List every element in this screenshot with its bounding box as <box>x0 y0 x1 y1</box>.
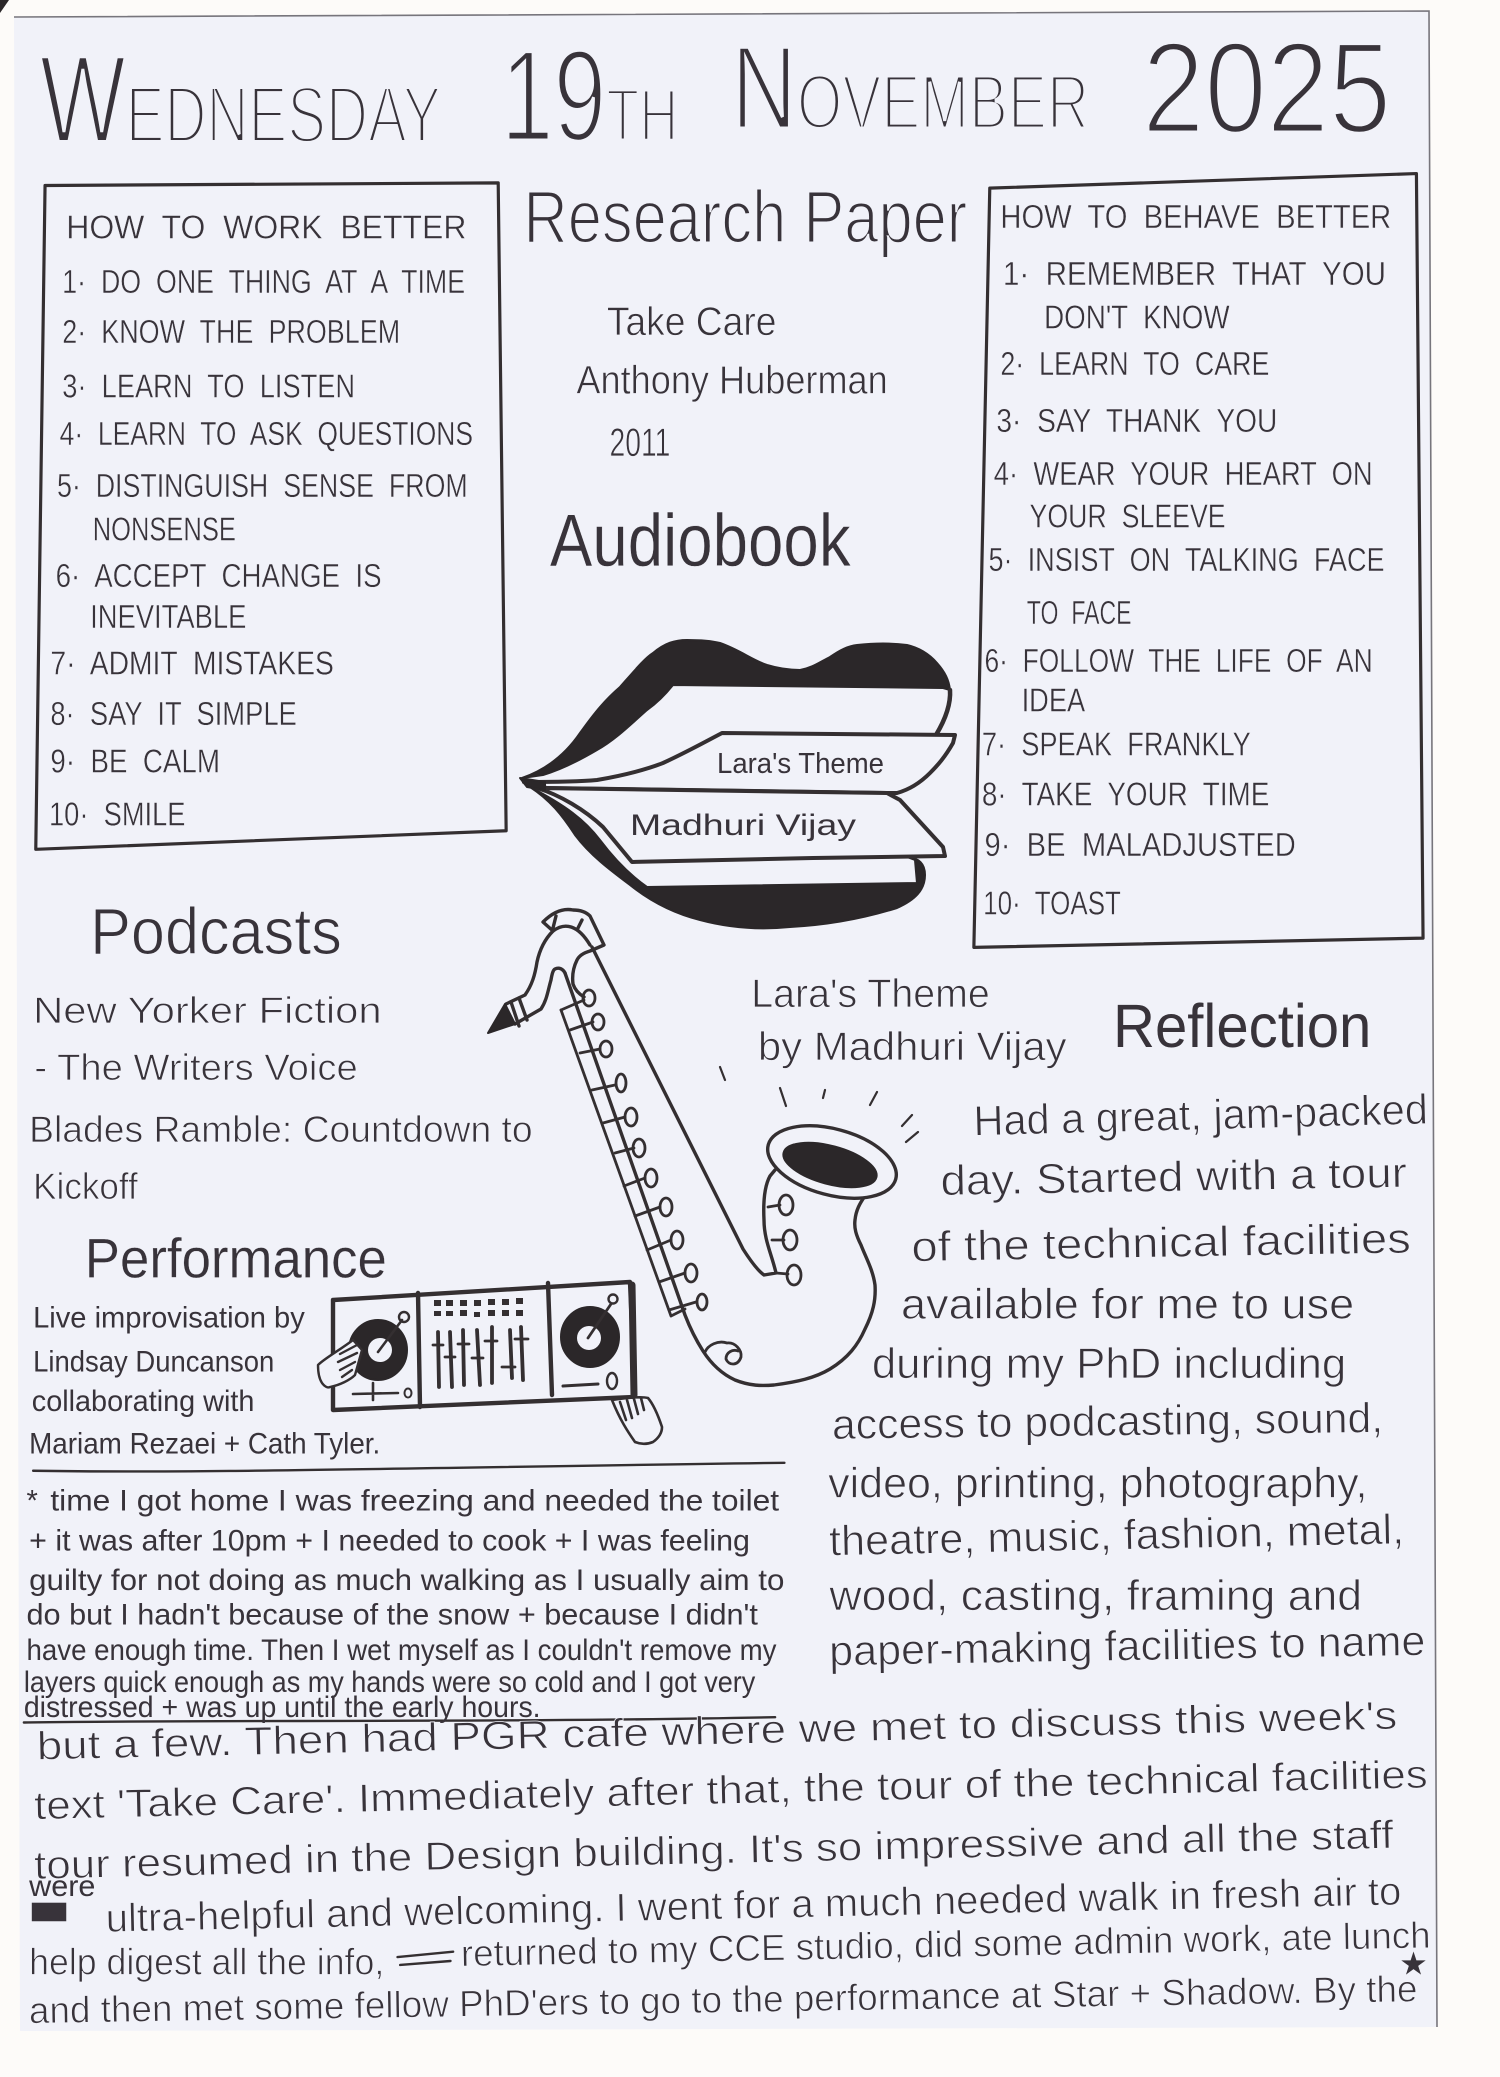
mixer knobs and faders <box>433 1298 528 1387</box>
text block: research paper details <box>576 300 888 465</box>
text block: reflection continued: text 'Take Care'. Immediately after that, the tour of the technical facilities <box>34 1753 1428 1828</box>
panel: how to behave better <box>974 174 1423 947</box>
text block: reflection column: paper-making facilities to name <box>829 1617 1426 1675</box>
saxophone neck <box>506 910 604 1004</box>
text block: reflection column: Had a great, jam-packed <box>973 1086 1428 1145</box>
sound lines from bell <box>720 1067 918 1142</box>
list: behave better items: 6· FOLLOW THE LIFE OF AN <box>984 643 1373 680</box>
list: behave better items: TO FACE <box>1027 595 1132 632</box>
list: behave better items: 9· BE MALADJUSTED <box>984 827 1296 864</box>
text block: boxed continuation note: * <box>26 1485 38 1517</box>
list: work better items: 4· LEARN TO ASK QUESTIONS <box>60 416 473 453</box>
text block: reflection column: wood, casting, framing and <box>828 1572 1362 1619</box>
book page: Lara's Theme <box>524 733 955 793</box>
bottom lip <box>530 787 925 928</box>
text block: boxed continuation note: layers quick enough as my hands were so cold and I got very <box>24 1667 756 1699</box>
text block: sax caption: by Madhuri Vijay <box>758 1025 1067 1069</box>
text block: performance details: collaborating with <box>32 1386 254 1418</box>
top lip <box>522 640 950 778</box>
list: behave better items: 10· TOAST <box>983 885 1121 922</box>
right turntable <box>561 1294 619 1389</box>
list: work better items: 1· DO ONE THING AT A TIME <box>62 264 465 301</box>
text block: reflection column: available for me to use <box>901 1280 1354 1327</box>
text block: performance details: Live improvisation by <box>33 1303 305 1335</box>
list: work better items: 3· LEARN TO LISTEN <box>62 368 355 405</box>
saxophone key rail and keys <box>561 990 801 1364</box>
panel: how to work better <box>36 183 506 849</box>
saxophone body <box>565 973 875 1385</box>
title <box>40 14 1391 169</box>
text block: reflection continued: returned to my CCE studio, did some admin work, ate lunch <box>460 1914 1431 1974</box>
list: work better items: 8· SAY IT SIMPLE <box>50 696 297 733</box>
text block: boxed continuation note: distressed + was up until the early hours. <box>24 1692 541 1724</box>
text block: research paper details: 2011 <box>609 421 670 465</box>
list: behave better items: YOUR SLEEVE <box>1030 498 1226 535</box>
text block: podcast list: Blades Ramble: Countdown to <box>29 1108 533 1150</box>
text block: boxed continuation note: + it was after 10pm + I needed to cook + I was feeling <box>29 1525 750 1557</box>
list: behave better items <box>982 256 1386 922</box>
icon: lips shaped as an open book <box>520 640 955 928</box>
text block: podcast list: - The Writers Voice <box>34 1046 358 1088</box>
list: work better items: 5· DISTINGUISH SENSE FROM <box>57 468 468 505</box>
saxophone mouthpiece <box>488 1004 515 1033</box>
book page: Madhuri Vijay: Madhuri Vijay <box>630 809 856 842</box>
heading: podcasts: Podcasts <box>90 895 342 969</box>
text block: reflection column: access to podcasting, sound, <box>832 1394 1383 1448</box>
list: behave better items: 8· TAKE YOUR TIME <box>982 777 1269 814</box>
left hand <box>318 1340 362 1387</box>
heading: how to work better: HOW TO WORK BETTER <box>66 210 466 247</box>
text block: reflection continued: were <box>28 1871 95 1903</box>
icon: star marker: ★ <box>1399 1945 1428 1981</box>
icon: DJ decks and mixer <box>318 1282 662 1444</box>
title: 2025 <box>1142 14 1391 160</box>
text block: boxed continuation note: do but I hadn't because of the snow + because I didn't <box>26 1599 758 1631</box>
list: work better items: 10· SMILE <box>49 796 186 833</box>
text block: podcast list: New Yorker Fiction <box>33 989 382 1031</box>
text block: performance details: Lindsay Duncanson <box>33 1346 274 1378</box>
list: behave better items: 2· LEARN TO CARE <box>1000 346 1269 383</box>
text block: performance details: Mariam Rezaei + Cath Tyler. <box>29 1429 380 1461</box>
text block: reflection continued: ultra-helpful and welcoming. I went for a much needed walk in fresh air to <box>105 1870 1402 1941</box>
list: behave better items: IDEA <box>1022 683 1086 720</box>
heading: research paper: Research Paper <box>523 175 967 258</box>
text block: boxed continuation note <box>24 1463 784 1724</box>
list: work better items: 7· ADMIT MISTAKES <box>50 645 334 682</box>
list: work better items: 9· BE CALM <box>50 743 220 780</box>
text block: reflection column: day. Started with a tour <box>940 1149 1407 1204</box>
heading: performance: Performance <box>85 1227 387 1289</box>
text block: reflection continued: but a few. Then had PGR cafe where we met to discuss this week's <box>36 1694 1398 1769</box>
book page: Madhuri Vijay <box>537 788 945 862</box>
book page: Lara's Theme: Lara's Theme <box>717 748 884 780</box>
right corner of upper lip <box>936 690 950 735</box>
text block: reflection column: theatre, music, fashion, metal, <box>829 1506 1405 1565</box>
list: behave better items: 7· SPEAK FRANKLY <box>982 726 1251 763</box>
text block: research paper details: Anthony Huberman <box>576 359 888 403</box>
list: work better items: 6· ACCEPT CHANGE IS <box>56 558 382 595</box>
list: behave better items: 5· INSIST ON TALKING FACE <box>988 542 1385 579</box>
text block: reflection continued: help digest all the info, <box>29 1940 384 1982</box>
text block: boxed continuation note: time I got home I was freezing and needed the toilet <box>50 1485 779 1517</box>
title: 19TH <box>501 22 678 168</box>
list: behave better items: DON'T KNOW <box>1044 300 1230 337</box>
text block: reflection continued: and then met some fellow PhD'ers to go to the performance at Star + Shadow. By the <box>29 1967 1418 2031</box>
text block: reflection column: during my PhD including <box>872 1340 1346 1387</box>
list: behave better items: 1· REMEMBER THAT YOU <box>1003 256 1386 293</box>
text block: reflection continued: tour resumed in the Design building. It's so impressive and all the staff <box>34 1813 1395 1888</box>
text block: reflection continued <box>28 1694 1431 2031</box>
book spine point <box>520 778 545 790</box>
list: work better items: NONSENSE <box>93 512 236 549</box>
text block: sax caption: Lara's Theme <box>751 972 990 1016</box>
saxophone bell <box>760 1113 904 1211</box>
list: work better items <box>49 264 473 833</box>
list: work better items: INEVITABLE <box>90 599 246 636</box>
right hand <box>612 1397 662 1444</box>
list: behave better items: 3· SAY THANK YOU <box>996 403 1277 440</box>
heading: audiobook: Audiobook <box>550 499 851 582</box>
text block: sax caption <box>751 972 1067 1069</box>
list: work better items: 2· KNOW THE PROBLEM <box>62 314 400 351</box>
heading: how to behave better: HOW TO BEHAVE BETTER <box>1000 199 1391 236</box>
text block: reflection column <box>828 1086 1428 1675</box>
text block: podcast list <box>29 989 533 1207</box>
list: behave better items: 4· WEAR YOUR HEART ON <box>994 456 1373 493</box>
icon: saxophone <box>488 910 918 1385</box>
text block: reflection column: video, printing, photography, <box>828 1459 1367 1506</box>
title: WEDNESDAY <box>40 30 441 169</box>
deck casing <box>333 1282 635 1410</box>
text block: boxed continuation note: guilty for not doing as much walking as I usually aim to <box>29 1565 784 1597</box>
heading: reflection: Reflection <box>1113 992 1371 1060</box>
title: NOVEMBER <box>731 22 1089 155</box>
text block: podcast list: Kickoff <box>33 1165 138 1207</box>
text block: research paper details: Take Care <box>607 300 776 344</box>
left turntable <box>349 1312 412 1400</box>
text block: boxed continuation note: have enough time. Then I wet myself as I couldn't remove my <box>26 1635 777 1667</box>
text block: reflection column: of the technical facilities <box>911 1215 1411 1270</box>
text block: performance details <box>29 1303 380 1461</box>
